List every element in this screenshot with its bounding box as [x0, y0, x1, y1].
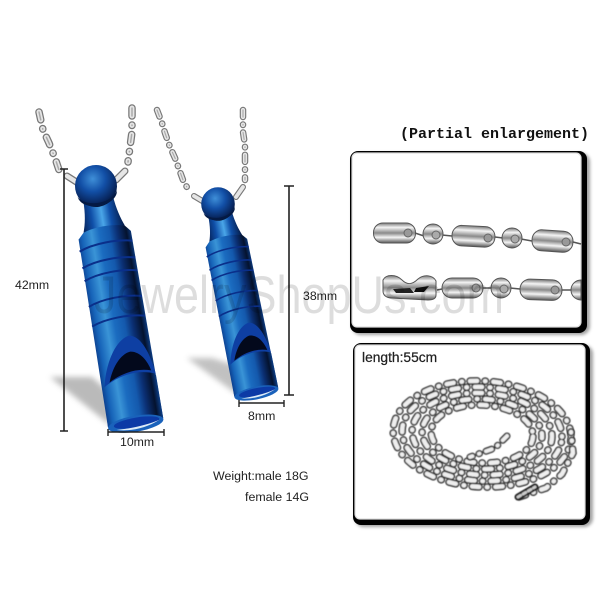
bottom chain row with clasp — [383, 276, 581, 301]
label: chain length: length:55cm — [362, 350, 437, 365]
dimension: 10mm width — [108, 429, 164, 449]
dimension: 38mm height — [284, 186, 337, 395]
dimension: 42mm height — [15, 169, 68, 431]
heading: partial enlargement: (Partial enlargement) — [400, 126, 589, 143]
weight text — [213, 469, 309, 504]
chain coil — [390, 376, 574, 492]
panel: chain close-up — [350, 151, 590, 335]
top chain row — [374, 223, 581, 253]
watermark: JewelryShopUs.com — [94, 266, 504, 325]
small blue whistle pendant — [193, 183, 280, 404]
dimension: 38mm height: 38mm — [303, 289, 337, 303]
dimension: 42mm height: 42mm — [15, 278, 49, 292]
shadow: large whistle — [50, 377, 112, 425]
shadow: small whistle — [187, 358, 243, 395]
panel: full chain coil — [353, 343, 593, 527]
dimension: 8mm width: 8mm — [248, 409, 275, 423]
necklace chain: small pendant right — [236, 110, 245, 197]
large blue whistle pendant — [65, 161, 165, 436]
necklace chain: small pendant left — [157, 110, 204, 202]
necklace chain: large pendant left — [39, 112, 78, 183]
dimension: 8mm width — [239, 400, 284, 423]
weight text: Weight:male 18G — [213, 469, 309, 483]
chain tails and clasp — [470, 432, 573, 497]
necklace chain: large pendant right — [116, 108, 132, 180]
dimension: 10mm width: 10mm — [120, 435, 154, 449]
weight text: female 14G — [245, 490, 309, 504]
